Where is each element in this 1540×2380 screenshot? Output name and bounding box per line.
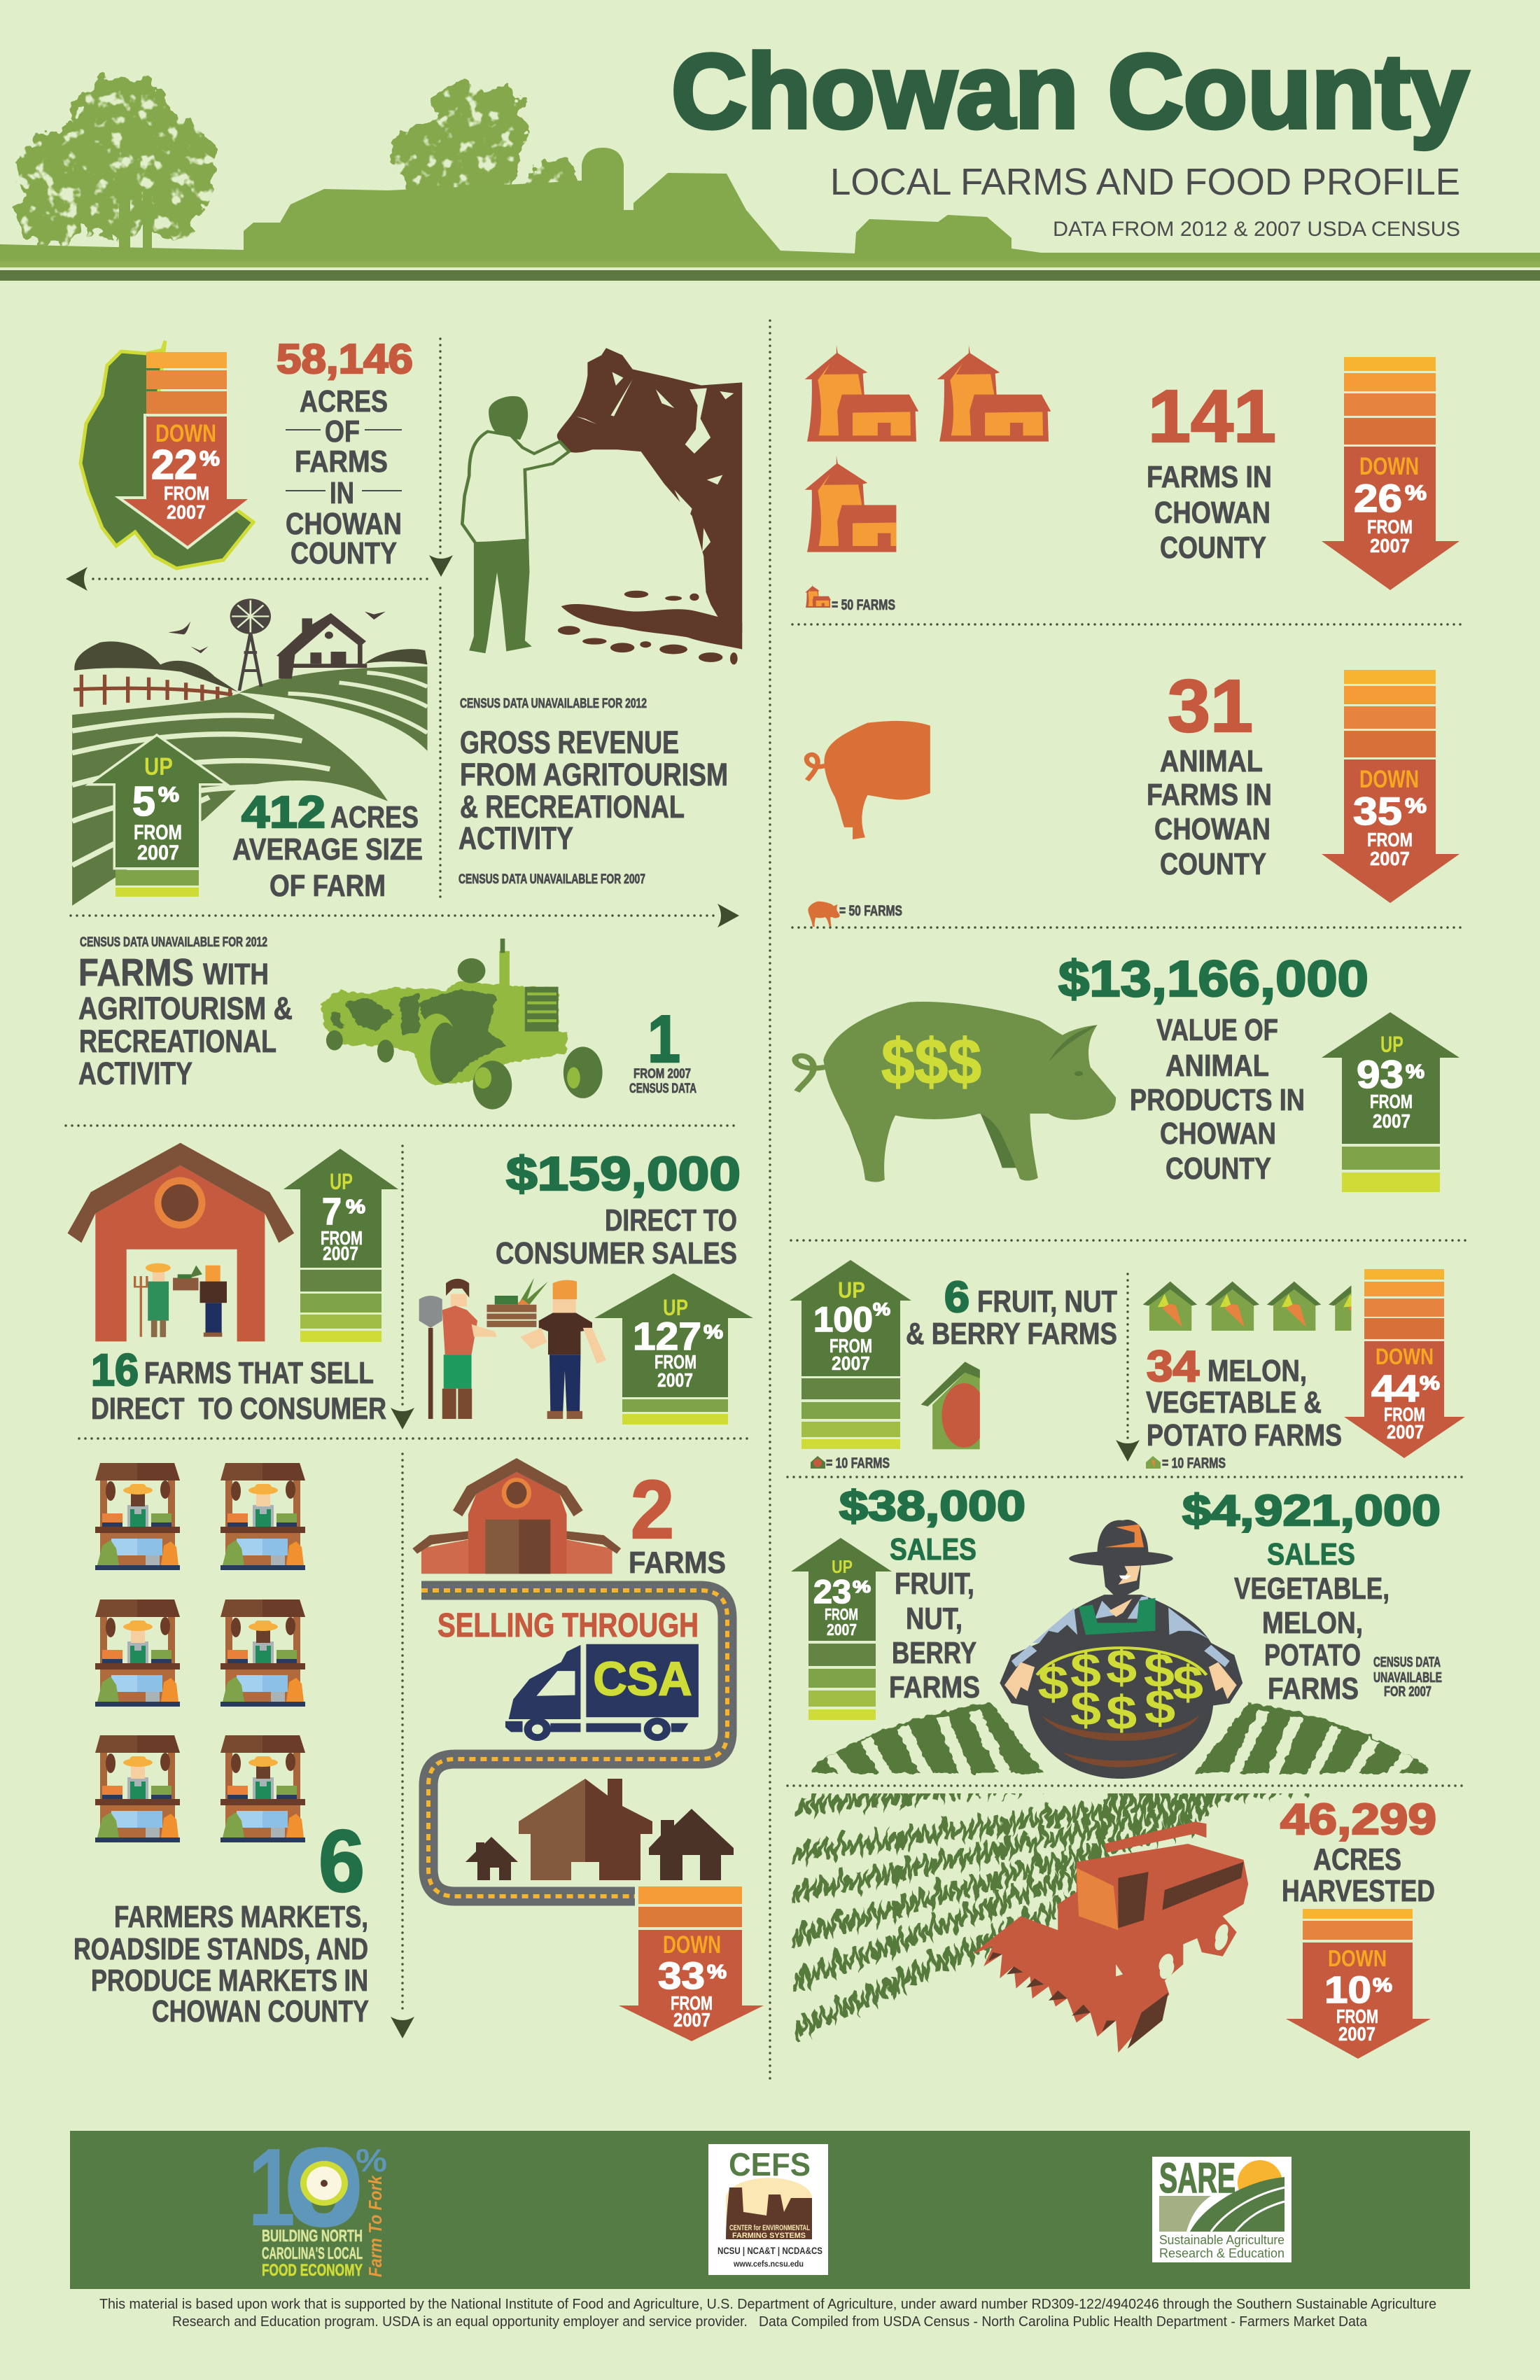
note: census data unavailable for 2007: UNAVAILABLE (1373, 1670, 1442, 1686)
label: fruit, nut, berry farms: FARMS (889, 1670, 980, 1704)
stat: 1 from 2007 census data: 1 (648, 1002, 680, 1077)
arrow: down 26 percent: % (1405, 482, 1427, 505)
panel: sales with farmer (791, 1483, 1442, 1779)
label: value of animal products in Chowan County: PRODUCTS IN (1130, 1083, 1305, 1117)
stat: 34 melon, vegetable and potato farms: 34 (1147, 1343, 1200, 1391)
panel: farms in Chowan County (805, 345, 1460, 613)
illustration: red barn with people (67, 1143, 294, 1341)
arrow: down 33 percent: DOWN (663, 1931, 721, 1959)
label: farms in Chowan County (1147, 460, 1272, 565)
footer band with logos (70, 2126, 1470, 2289)
stat: $38,000 sales (839, 1483, 1026, 1567)
icon: green pig with dollar signs (795, 1002, 1116, 1182)
label: vegetable, melon, potato farms: POTATO (1264, 1638, 1361, 1672)
farmer and customer (135, 1264, 227, 1337)
panel: farms with agritourism: RECREATIONAL (79, 1023, 276, 1059)
label: farms in Chowan County: FARMS IN (1147, 460, 1272, 494)
label: fruit, nut, berry farms: FRUIT, (895, 1567, 974, 1601)
illustration: harvester (972, 1821, 1248, 2052)
tree left (18, 77, 215, 248)
legend: carrot house equals 10 farms (1146, 1455, 1226, 1471)
label: farms in Chowan County: COUNTY (1160, 531, 1266, 565)
panel: farms with agritourism: ACTIVITY (78, 1056, 192, 1091)
arrow: up 23 percent: FROM (825, 1605, 858, 1623)
panel: gross revenue from agritourism (458, 696, 728, 887)
logo: SARE: Sustainable Agriculture (1159, 2233, 1284, 2247)
arrow: up 93 percent: % (1406, 1060, 1424, 1082)
illustration: farmer with bowl of money: $ (1037, 1656, 1069, 1709)
arrow: down 22 percent: 22 (151, 442, 197, 488)
arrow: down 10 percent: 2007 (1338, 2023, 1376, 2045)
tree right (392, 80, 581, 210)
label: farmers markets, roadside stands, and produce markets: CHOWAN COUNTY (152, 1994, 369, 2029)
arrow: up 7 percent (284, 1149, 398, 1342)
label: farmers markets, roadside stands, and produce markets: PRODUCE MARKETS IN (91, 1963, 368, 1998)
stat: $4,921,000 sales: SALES (1267, 1537, 1355, 1572)
arrow: up 127 percent: % (704, 1321, 723, 1343)
illustration: striped fields (811, 1702, 1428, 1777)
logo: 10 percent campaign: 0 (284, 2126, 364, 2249)
arrow: up 23 percent: 23 (813, 1573, 851, 1610)
label: animal farms in Chowan County: FARMS IN (1147, 778, 1272, 812)
header landscape silhouette (0, 77, 1540, 281)
arrow: up 100 percent: 100 (813, 1300, 873, 1339)
logo: CEFS: FARMING SYSTEMS (732, 2232, 806, 2240)
arrow: down 10 percent: 10 (1324, 1969, 1371, 2011)
note: census data unavailable for 2007 (1373, 1655, 1442, 1700)
panel: fruit, nut and berry farms (790, 1260, 1117, 1471)
arrow: down 35 percent: 35 (1353, 789, 1402, 833)
arrow: down 44 percent: 44 (1371, 1368, 1419, 1410)
arrow: up 5 percent: 2007 (137, 841, 179, 864)
illustration: farmer with bowl of money: $ (1106, 1639, 1137, 1693)
label: acres of farms in Chowan County (286, 384, 402, 570)
stat: 2 farms: FARMS (629, 1546, 726, 1580)
stat: 412 acres average size of farm: 412 (241, 787, 326, 837)
hat and face (1069, 1520, 1173, 1600)
label: acres harvested: ACRES (1313, 1842, 1401, 1877)
footer credit text: This material is based upon work that is supported by the National Institute of Food and Agriculture, U.S. Department of Agriculture, under award number RD309-122/4940246 through the Southern Sustainable Agriculture (99, 2297, 1436, 2312)
cow (557, 348, 742, 632)
illustration: farmer with bowl of money: $ (1070, 1644, 1101, 1698)
illustration: woman and man with crate (419, 1278, 606, 1419)
stat: 34 melon, vegetable and potato farms: POTATO FARMS (1147, 1418, 1342, 1452)
stat: 58,146: 58,146 (276, 336, 413, 382)
label: animal farms in Chowan County: COUNTY (1160, 847, 1266, 881)
panel: acres of farms (80, 336, 413, 570)
label: vegetable, melon, potato farms: FARMS (1268, 1672, 1359, 1706)
label: acres harvested (1282, 1842, 1435, 1908)
logo: SARE: SARE (1159, 2155, 1236, 2202)
stat: $159,000: $159,000 (506, 1147, 741, 1200)
arrow: up 100 percent (790, 1260, 911, 1449)
stat: 34 melon, vegetable and potato farms: MELON, (1208, 1354, 1307, 1388)
panel: farms with agritourism (78, 935, 696, 1110)
arrow: up 127 percent: UP (663, 1295, 688, 1320)
arrow: down 33 percent: 2007 (673, 2009, 710, 2031)
panel: average farm size (72, 598, 428, 906)
label: selling through: SELLING THROUGH (438, 1607, 699, 1644)
label: acres of farms in Chowan County: FARMS (295, 444, 388, 479)
icon: CSA delivery truck: CSA (593, 1653, 692, 1705)
label: acres harvested: HARVESTED (1282, 1874, 1435, 1908)
arrow: down 26 percent: FROM (1367, 516, 1413, 538)
logo: 10 percent campaign: 1 (248, 2126, 295, 2249)
arrow: down 35 percent: FROM (1367, 829, 1413, 850)
label: vegetable, melon, potato farms (1234, 1572, 1390, 1706)
arrow: up 100 percent: 2007 (832, 1352, 870, 1374)
stat: 1 from 2007 census data (629, 1002, 696, 1096)
panel: direct to consumer farms (67, 1143, 398, 1426)
illustration: farm scene (72, 598, 428, 906)
arrow: down 22 percent (123, 352, 248, 546)
stat: 6 fruit, nut and berry farms: & BERRY FARMS (906, 1317, 1117, 1351)
panel: melon, vegetable and potato farms (1143, 1269, 1465, 1471)
arrow: up 7 percent: 7 (322, 1191, 342, 1233)
dollar signs on pig: $$$ (881, 1026, 981, 1098)
logo: CEFS: CENTER for ENVIRONMENTAL (729, 2224, 810, 2232)
arrow: down 26 percent: DOWN (1359, 453, 1419, 480)
arrow: down 26 percent (1322, 357, 1460, 590)
label: acres of farms in Chowan County: ACRES (300, 384, 388, 419)
arrow: down 22 percent: FROM (164, 482, 209, 504)
stat: $38,000 sales: $38,000 (839, 1483, 1026, 1530)
arrow: dotted right (71, 904, 739, 927)
arrow: down 44 percent: FROM (1384, 1404, 1425, 1425)
arrow: up 127 percent: 127 (633, 1314, 701, 1358)
arrow: up 127 percent (594, 1273, 753, 1424)
label: acres of farms in Chowan County: IN (330, 476, 354, 510)
fence (74, 675, 232, 707)
stat: 412 acres average size of farm: ACRES (330, 800, 419, 834)
arrow: down 10 percent: % (1373, 1974, 1392, 1996)
logo: 10 percent campaign (248, 2126, 387, 2280)
subtitle: LOCAL FARMS AND FOOD PROFILE (830, 161, 1460, 203)
arrow: up 5 percent: UP (144, 753, 173, 780)
legend: pig equals 50 farms: = 50 FARMS (839, 903, 902, 919)
arrow: down 26 percent: 2007 (1370, 535, 1410, 556)
arrow: down 22 percent: 2007 (167, 501, 206, 523)
arrow: up 127 percent: FROM (654, 1351, 696, 1373)
label: animal farms in Chowan County: ANIMAL (1160, 744, 1263, 778)
logo: 10 percent campaign: FOOD ECONOMY (262, 2261, 363, 2280)
illustration: farmer with bowl of money: $ (1144, 1680, 1175, 1734)
stat: 34 melon, vegetable and potato farms (1146, 1343, 1342, 1452)
icon: cropped strawberry house (921, 1362, 980, 1449)
stat: 16 farms that sell direct to consumer: FARMS THAT SELL (144, 1356, 374, 1390)
arrow: up 5 percent (92, 736, 223, 897)
legend: strawberry house equals 10 farms: = 10 FARMS (826, 1455, 890, 1471)
panel: gross revenue from agritourism: ACTIVITY (458, 820, 573, 856)
logo: 10 percent campaign: BUILDING NORTH (262, 2227, 363, 2246)
label: fruit, nut, berry farms: NUT, (906, 1602, 962, 1636)
note: census data unavailable for 2007: FOR 2007 (1384, 1684, 1432, 1700)
label: value of animal products in Chowan County: ANIMAL (1166, 1049, 1269, 1083)
arrow: dotted down (391, 1146, 414, 1429)
label: value of animal products in Chowan County: VALUE OF (1156, 1013, 1278, 1047)
arrow: dotted down and left from acres panel (66, 339, 453, 591)
stat: $13,166,000: $13,166,000 (1058, 951, 1368, 1007)
arrow: up 93 percent: 2007 (1373, 1110, 1410, 1132)
legend: barn equals 50 farms: = 50 FARMS (832, 597, 895, 613)
arrow: up 93 percent: UP (1380, 1032, 1404, 1057)
label: animal farms in Chowan County (1147, 744, 1272, 881)
arrow: up 93 percent: FROM (1370, 1091, 1413, 1112)
arrow: down 33 percent: 33 (658, 1955, 705, 1997)
farm buildings silhouette (0, 148, 1540, 267)
icons: three houses (465, 1779, 734, 1880)
stat: 6 fruit, nut and berry farms (906, 1273, 1117, 1351)
stat: 6: 6 (318, 1813, 365, 1910)
legend: strawberry house equals 10 farms (811, 1455, 890, 1471)
stat: 16 farms that sell direct to consumer (91, 1345, 386, 1426)
arrow: up 23 percent (791, 1538, 892, 1720)
arrow: down 33 percent: % (707, 1961, 727, 1982)
logo: 10 percent campaign: Farm To Fork (365, 2175, 386, 2277)
stat: 31: 31 (1168, 665, 1253, 748)
stat: 6 fruit, nut and berry farms: 6 (944, 1273, 969, 1322)
icons: carrot houses (1142, 1281, 1351, 1331)
arrow: up 127 percent: 2007 (657, 1369, 693, 1391)
illustration: crop rows (791, 1793, 1310, 2043)
stat: 2 farms: 2 (631, 1464, 674, 1556)
arrow: up 93 percent: 93 (1357, 1052, 1404, 1096)
panel: farms with agritourism: FARMS (78, 951, 194, 994)
logo: SARE (1152, 2155, 1292, 2262)
icons: barns, each 50 farms (805, 345, 1051, 552)
arrow: up 100 percent: UP (838, 1278, 865, 1303)
illustration: barn (412, 1458, 621, 1574)
panel: gross revenue from agritourism: FROM AGRITOURISM (460, 757, 728, 792)
label: fruit, nut, berry farms: BERRY (892, 1636, 976, 1670)
stat: $4,921,000 sales (1182, 1487, 1441, 1572)
boy (462, 396, 569, 653)
panel: animal farms (806, 665, 1460, 927)
panel: gross revenue from agritourism: GROSS REVENUE (460, 724, 679, 760)
left field (72, 694, 388, 906)
logo: 10 percent campaign: % (356, 2142, 387, 2178)
logo: CEFS: NCSU | NCA&T | NCDA&CS (718, 2245, 822, 2256)
panel: value of animal products (795, 951, 1460, 1192)
footer credit text (99, 2297, 1436, 2330)
icon: county map (80, 341, 253, 568)
arrow: down 10 percent (1286, 1909, 1431, 2059)
label: farms in Chowan County: CHOWAN (1154, 496, 1270, 530)
label: vegetable, melon, potato farms: VEGETABLE, (1234, 1572, 1390, 1606)
arrow: down 35 percent: 2007 (1370, 848, 1410, 869)
arrow: up 100 percent: % (873, 1300, 890, 1320)
arrow: down 44 percent: 2007 (1387, 1421, 1424, 1443)
stat: 6 fruit, nut and berry farms: FRUIT, NUT (977, 1284, 1117, 1319)
label: farmers markets, roadside stands, and produce markets: ROADSIDE STANDS, AND (74, 1932, 368, 1966)
arrow: dotted down to bottom (391, 1454, 414, 2038)
stat: 412 acres average size of farm: AVERAGE SIZE (232, 832, 423, 867)
stat: 46,299: 46,299 (1280, 1795, 1436, 1844)
illustration: tractor (321, 939, 603, 1110)
label: direct to consumer sales: CONSUMER SALES (496, 1236, 737, 1270)
illustration: farmer with bowl of money (1000, 1520, 1242, 1779)
stat: 412 acres average size of farm: OF FARM (270, 869, 386, 903)
label: farmers markets, roadside stands, and produce markets: FARMERS MARKETS, (114, 1900, 368, 1934)
panel: gross revenue from agritourism: & RECREATIONAL (460, 789, 685, 825)
note: census data unavailable for 2007: CENSUS DATA (1373, 1655, 1441, 1670)
panel: direct to consumer sales (419, 1147, 753, 1424)
arrow: down 33 percent: FROM (671, 1992, 713, 2014)
windmill (230, 598, 271, 691)
illustration: farmer with bowl of money: $ (1144, 1644, 1175, 1698)
arrow: up 23 percent: UP (832, 1556, 853, 1577)
center vertical divider (769, 321, 771, 2085)
label: farmers markets, roadside stands, and produce markets (74, 1900, 369, 2029)
legend: pig equals 50 farms (808, 902, 902, 927)
stat: 16 farms that sell direct to consumer: 16 (91, 1345, 139, 1395)
arrow: down 26 percent: 26 (1354, 476, 1402, 520)
arrow: up 23 percent: 2007 (827, 1620, 857, 1639)
logo: CEFS: www.cefs.ncsu.edu (733, 2259, 804, 2269)
arrow: up 93 percent (1322, 1012, 1460, 1192)
arrow: down 22 percent: DOWN (155, 420, 216, 447)
stat: 141: 141 (1148, 375, 1276, 458)
label: value of animal products in Chowan County: COUNTY (1166, 1152, 1271, 1186)
right field (239, 666, 428, 751)
panel: acres harvested (791, 1793, 1436, 2059)
arrow: down 33 percent (619, 1886, 764, 2041)
stat: 16 farms that sell direct to consumer: DIRECT TO CONSUMER (91, 1392, 386, 1426)
stat: $4,921,000 sales: $4,921,000 (1182, 1487, 1441, 1535)
legend: carrot house equals 10 farms: = 10 FARMS (1162, 1455, 1226, 1471)
label: fruit, nut, berry farms (889, 1567, 980, 1704)
arrow: up 7 percent: % (346, 1196, 365, 1217)
arrow: up 7 percent: FROM (321, 1227, 363, 1249)
label: acres of farms in Chowan County: OF (325, 414, 360, 449)
label: value of animal products in Chowan County: CHOWAN (1160, 1116, 1276, 1151)
stat: 34 melon, vegetable and potato farms: VEGETABLE & (1146, 1385, 1322, 1420)
arrow: up 23 percent: % (853, 1578, 871, 1597)
illustration: farmer with bowl of money: $ (1106, 1686, 1137, 1740)
stat: 1 from 2007 census data: CENSUS DATA (629, 1082, 696, 1096)
icons: six market stalls (95, 1463, 305, 1842)
title: Chowan County (671, 32, 1469, 150)
mud (558, 591, 742, 664)
logo: CEFS: CEFS (729, 2146, 811, 2183)
logo: 10 percent campaign: CAROLINA'S LOCAL (262, 2244, 363, 2263)
arrow: down 22 percent: % (200, 447, 220, 470)
label: vegetable, melon, potato farms: MELON, (1262, 1606, 1363, 1640)
stat: 2 farms (629, 1464, 726, 1580)
panel: gross revenue from agritourism: CENSUS DATA UNAVAILABLE FOR 2012 (460, 696, 647, 711)
label: direct to consumer sales (496, 1203, 737, 1270)
legend: barn equals 50 farms (805, 584, 895, 613)
illustration: farmer with bowl of money: $ (1070, 1682, 1101, 1735)
label: acres of farms in Chowan County: CHOWAN (286, 507, 402, 541)
footer credit text: Research and Education program. USDA is an equal opportunity employer and service provider. Data Compiled from USDA Census - North Carolina Public Health Department - Farmers Market Data (172, 2314, 1368, 2330)
panel: farms with agritourism: WITH (203, 958, 269, 991)
arrow: down 35 percent: % (1405, 794, 1427, 818)
panel: farmers markets (74, 1463, 369, 2029)
arrow: up 5 percent: 5 (132, 778, 155, 825)
arrow: up 7 percent: UP (330, 1169, 353, 1194)
panel: farms with agritourism: CENSUS DATA UNAVAILABLE FOR 2012 (80, 935, 267, 950)
icon: cropped orange pig (806, 721, 930, 839)
data source line: DATA FROM 2012 & 2007 USDA CENSUS (1053, 218, 1460, 241)
panel: gross revenue from agritourism: CENSUS DATA UNAVAILABLE FOR 2007 (458, 872, 645, 887)
illustration: farmer with bowl of money: $ (1172, 1656, 1203, 1709)
panel: farms with agritourism: AGRITOURISM & (78, 990, 293, 1026)
label: value of animal products in Chowan County (1130, 1013, 1305, 1186)
logo: SARE: Research & Education (1159, 2246, 1284, 2260)
stat: 1 from 2007 census data: FROM 2007 (634, 1067, 691, 1082)
label: acres of farms in Chowan County: COUNTY (290, 536, 397, 570)
road (421, 1590, 727, 1896)
icon: CSA delivery truck (505, 1644, 699, 1741)
arrow: down 44 percent: % (1420, 1372, 1440, 1394)
label: direct to consumer sales: DIRECT TO (605, 1203, 737, 1238)
arrow: up 5 percent: % (158, 783, 179, 806)
logo: CEFS (708, 2144, 828, 2275)
arrow: down 44 percent (1344, 1269, 1465, 1458)
stat: 412 acres average size of farm (232, 787, 423, 903)
arrow: up 5 percent: FROM (134, 821, 182, 844)
panel: CSA farms (412, 1458, 764, 2041)
arrow: down 44 percent: DOWN (1376, 1344, 1434, 1369)
arrow: up 7 percent: 2007 (323, 1242, 358, 1264)
farmhouse (168, 612, 386, 678)
label: animal farms in Chowan County: CHOWAN (1154, 812, 1270, 846)
arrow: down 35 percent (1322, 670, 1460, 903)
arrow: down 10 percent: DOWN (1328, 1945, 1387, 1971)
stat: $38,000 sales: SALES (890, 1532, 976, 1567)
illustration: boy petting cow (462, 348, 742, 664)
arrow: down 35 percent: DOWN (1359, 766, 1419, 793)
arrow: up 100 percent: FROM (830, 1335, 872, 1357)
arrow: dotted down between fruit and melon panels (1116, 1274, 1140, 1462)
arrow: down 10 percent: FROM (1336, 2005, 1378, 2027)
